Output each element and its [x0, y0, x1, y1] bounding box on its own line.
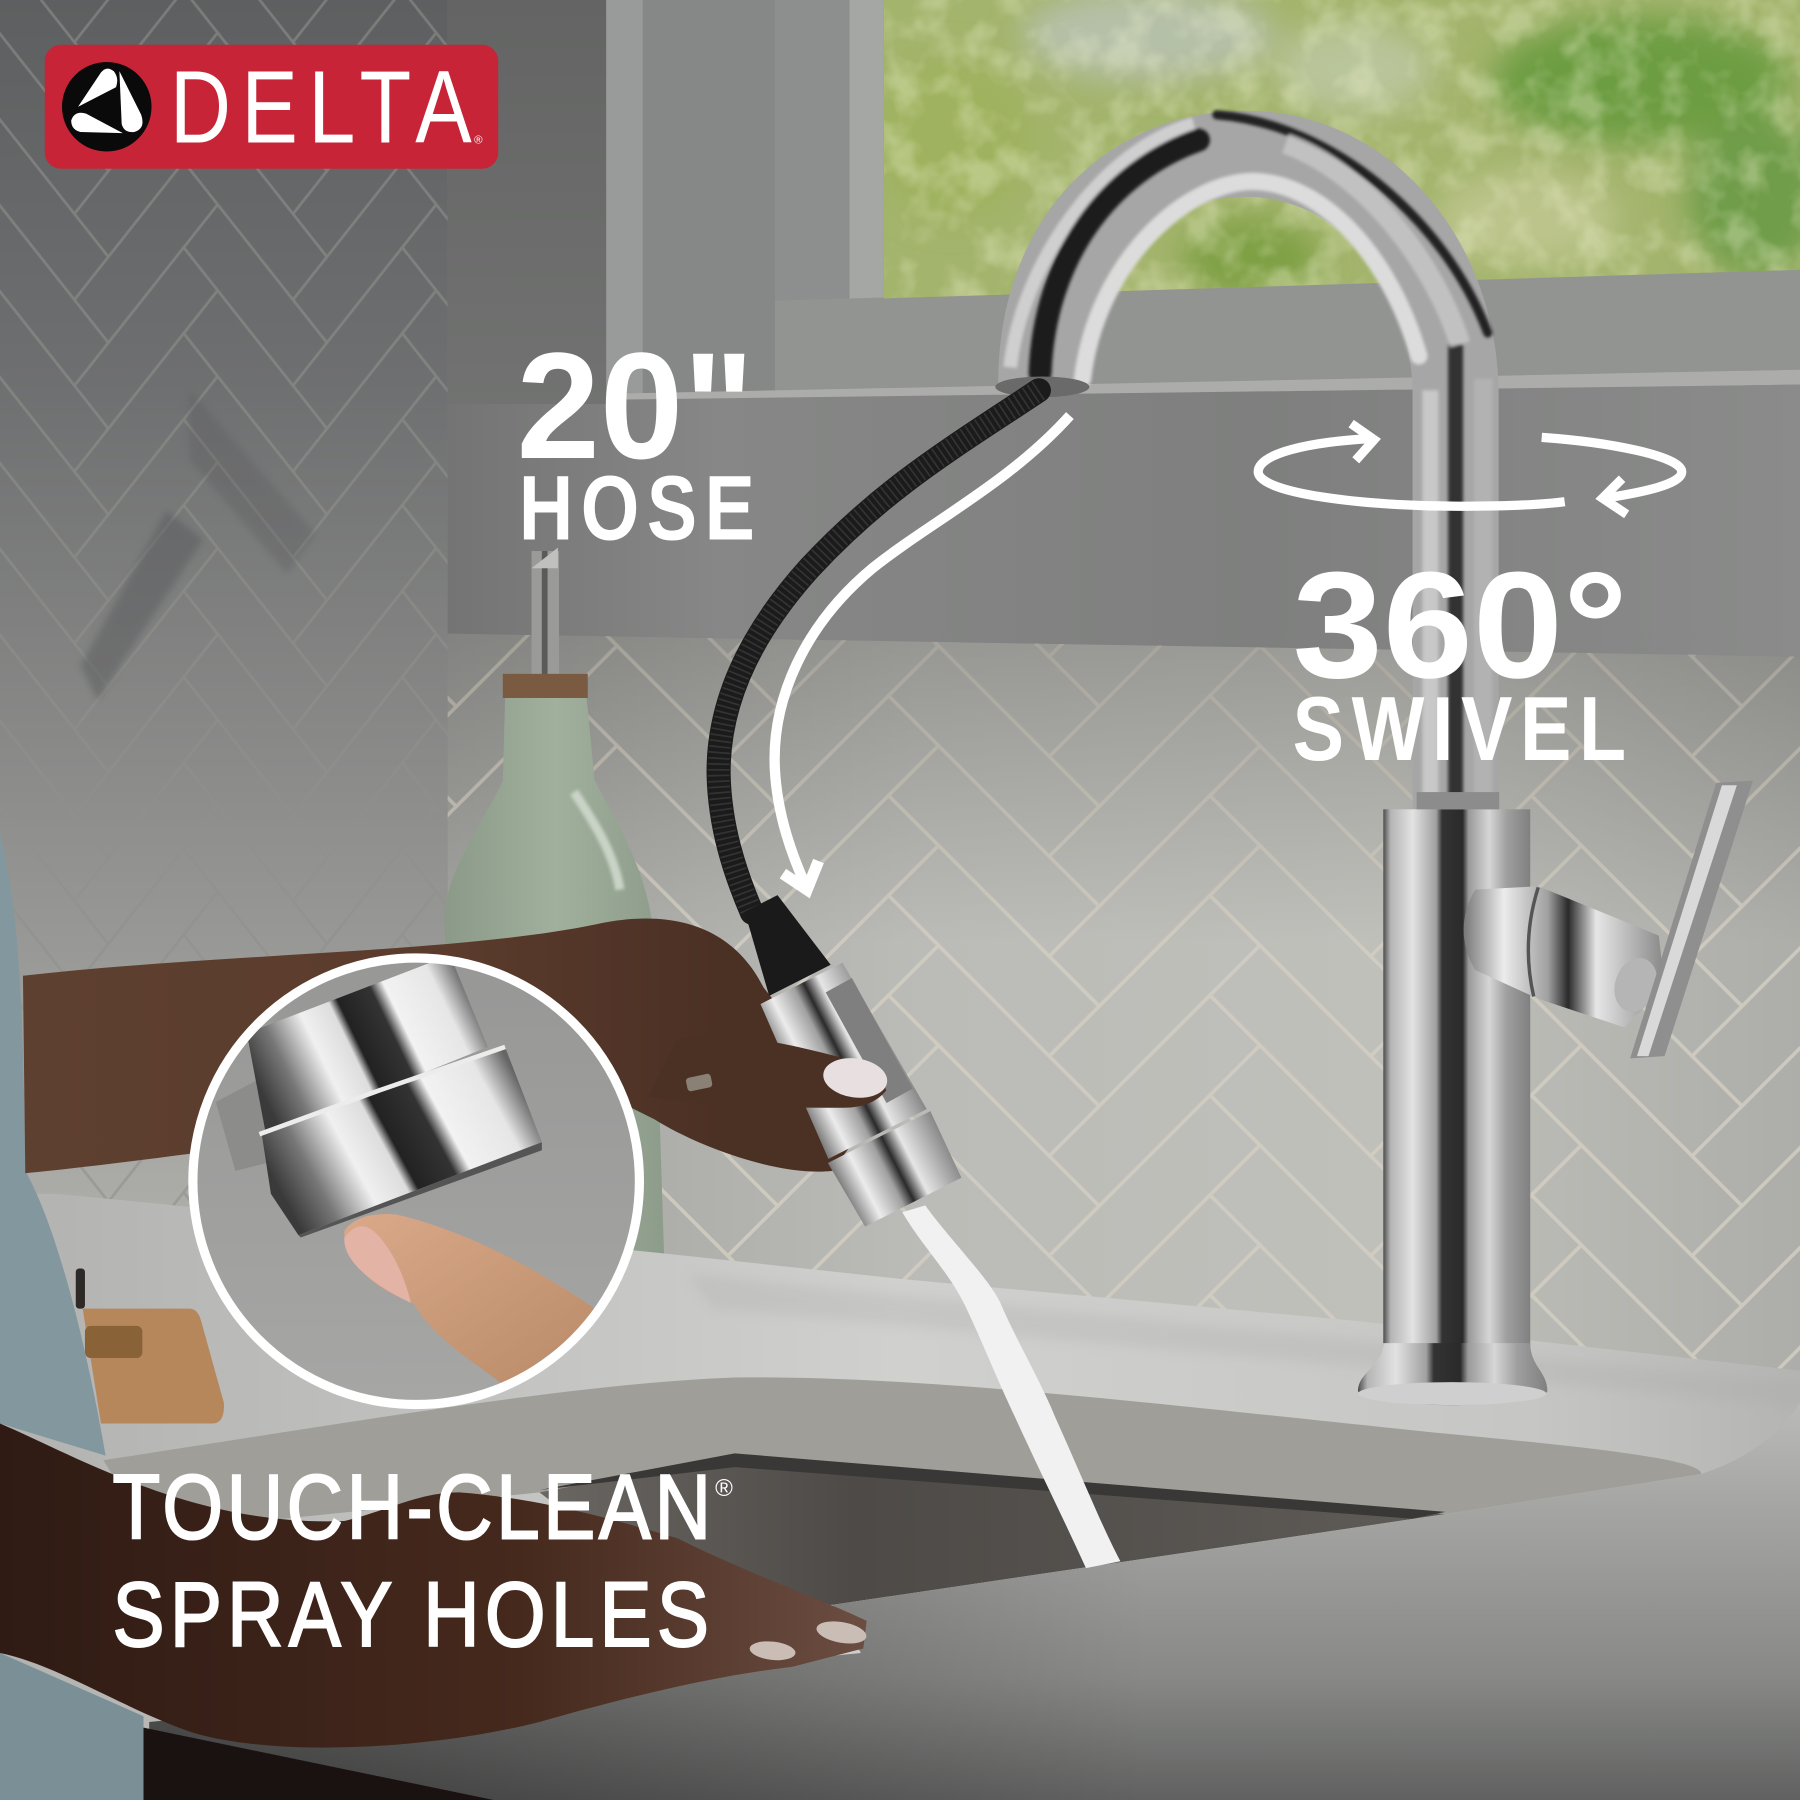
oil bottle — [444, 548, 666, 1322]
close-up nozzle — [216, 955, 542, 1238]
hose label: HOSE — [519, 456, 762, 559]
swivel callout — [1293, 541, 1634, 779]
touch-clean callout — [112, 1456, 733, 1667]
countertop — [0, 1194, 1800, 1800]
Delta logo badge — [45, 45, 498, 169]
hose length value: 20" — [517, 322, 754, 491]
registered mark: ® — [474, 134, 483, 146]
faucet — [995, 115, 1753, 1405]
cutting board — [76, 1268, 224, 1423]
callout circle: spray holes close-up — [193, 955, 639, 1405]
shirt — [0, 832, 143, 1800]
icon: Delta triangle mark — [62, 62, 152, 152]
touch-clean heading: TOUCH-CLEAN — [113, 1456, 715, 1559]
cabinet shadow — [143, 1728, 494, 1800]
hose length callout — [517, 322, 762, 559]
arrow: 360 degree swivel — [1258, 424, 1682, 514]
water stream — [902, 1205, 1120, 1568]
faucet handle — [1464, 781, 1753, 1058]
thumb and fingernail — [649, 1036, 890, 1108]
arrow: hose pull-down — [775, 416, 1070, 890]
faucet body — [1358, 792, 1547, 1405]
spray holes heading: SPRAY HOLES — [113, 1564, 714, 1667]
swivel degrees value: 360° — [1293, 541, 1628, 710]
upper arm and hand — [23, 919, 884, 1173]
swivel label: SWIVEL — [1293, 678, 1634, 779]
front counter — [149, 1403, 1800, 1800]
sink — [103, 1377, 1701, 1607]
faucet neck — [1010, 115, 1488, 809]
window with blurred trees — [872, 0, 1800, 301]
herringbone backsplash — [448, 634, 1800, 1406]
braided hose — [719, 390, 1039, 913]
sprayer head — [710, 878, 963, 1229]
wordmark: DELTA — [170, 49, 482, 165]
registered mark: ® — [715, 1475, 733, 1502]
left herringbone wall — [0, 0, 459, 1263]
faucet spout tip — [995, 377, 1089, 397]
lower hand — [0, 1423, 868, 1748]
window trim wall — [448, 0, 1800, 657]
close-up finger — [344, 1214, 603, 1387]
